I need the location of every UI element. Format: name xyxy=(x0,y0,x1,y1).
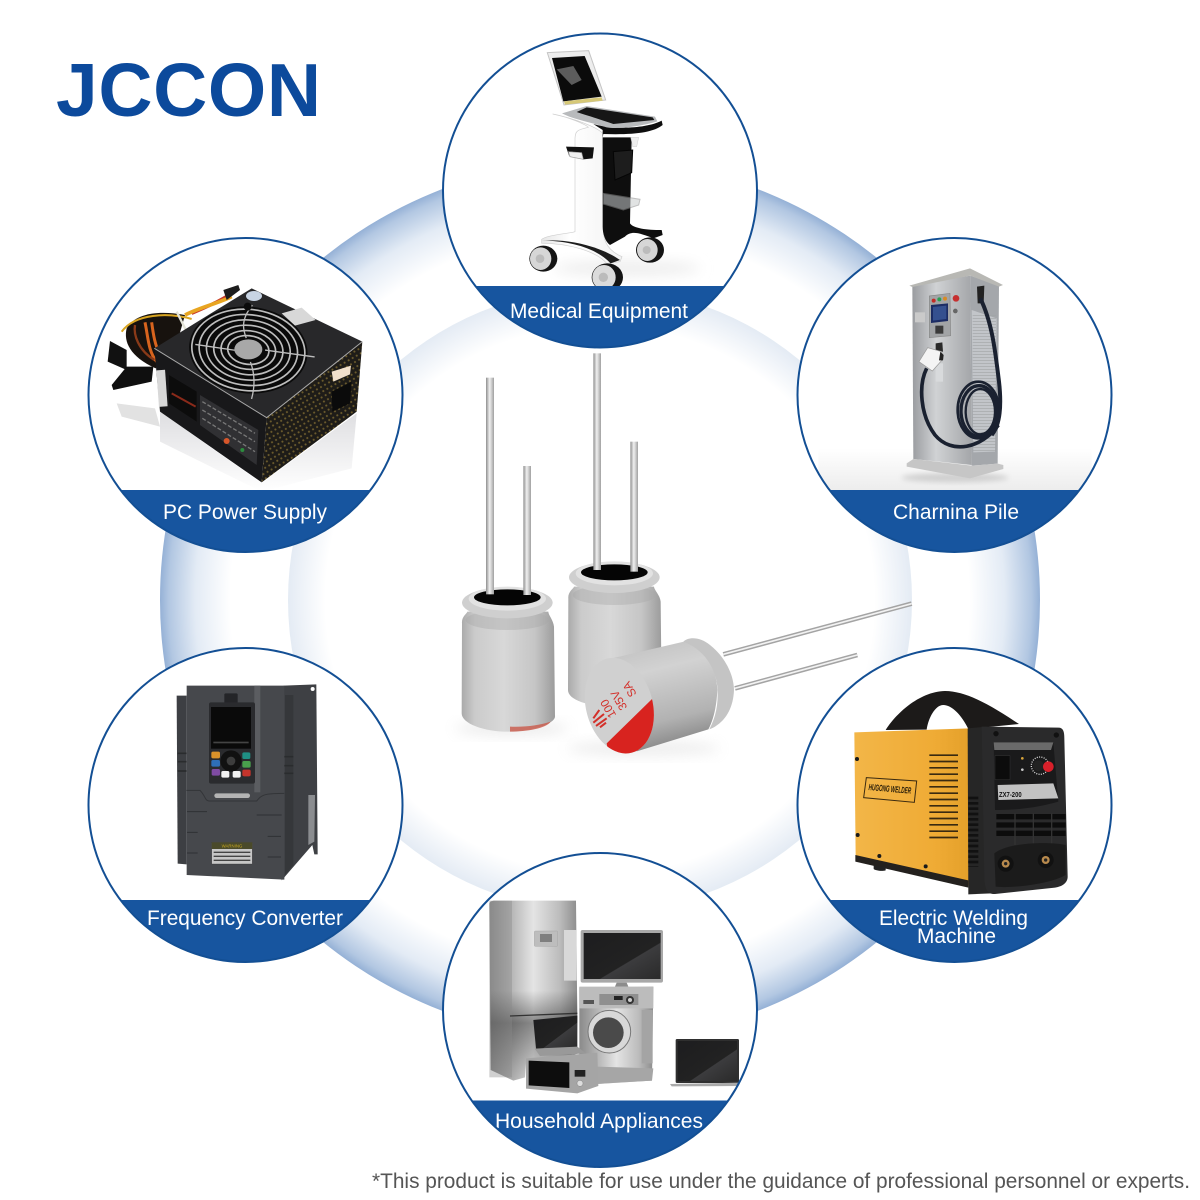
label: Machine xyxy=(917,925,996,948)
icon: frequency converter: WARNING xyxy=(222,844,243,849)
capacitors illustration xyxy=(455,353,912,763)
label: Charnina Pile xyxy=(893,501,1019,524)
footnote: *This product is suitable for use under the guidance of professional personnel or experts. xyxy=(372,1170,1190,1193)
panel: medical equipment xyxy=(443,34,757,348)
circle background xyxy=(443,853,757,1167)
icon: frequency converter xyxy=(177,684,318,880)
central disc xyxy=(288,288,912,912)
panel: PC power supply xyxy=(88,238,402,552)
icon: charging station xyxy=(818,268,1092,492)
icon: power supply unit xyxy=(108,285,362,492)
capacitor markings xyxy=(598,679,639,720)
panel: charging pile xyxy=(798,238,1112,552)
capacitor: front left xyxy=(462,378,555,732)
icon: appliances group xyxy=(489,901,739,1093)
circle outline xyxy=(798,648,1112,962)
circle background xyxy=(798,238,1112,552)
capacitor: lying with red marking xyxy=(575,604,912,763)
circle outline xyxy=(443,34,757,348)
circle outline xyxy=(798,238,1112,552)
circle outline xyxy=(443,853,757,1167)
label: Frequency Converter xyxy=(147,907,343,930)
circle outline xyxy=(88,648,402,962)
banner xyxy=(830,490,1080,552)
icon: welder: HUGONG WELDER xyxy=(868,782,912,796)
capacitor markings: SA xyxy=(620,679,639,699)
background ring xyxy=(160,160,1040,1040)
circle background xyxy=(88,648,402,962)
banner xyxy=(120,900,370,962)
capacitor markings: 100 xyxy=(598,696,619,720)
panel: household appliances xyxy=(443,853,757,1167)
icon: welder xyxy=(854,691,1068,894)
banner xyxy=(120,490,370,552)
label: PC Power Supply xyxy=(163,501,327,524)
banner xyxy=(475,286,725,347)
panel: frequency converter xyxy=(88,648,402,962)
capacitor markings: 35V xyxy=(608,688,630,712)
circle background xyxy=(798,648,1112,962)
floor shadows xyxy=(455,722,720,756)
icon: welder: ZX7-200 xyxy=(999,790,1022,799)
capacitor: back xyxy=(568,353,662,707)
banner xyxy=(472,1100,728,1167)
logo: JCCON: JCCON xyxy=(56,48,321,132)
circle background xyxy=(88,238,402,552)
label: Medical Equipment xyxy=(510,300,688,323)
icon: ultrasound cart xyxy=(529,51,700,291)
circle outline xyxy=(88,238,402,552)
circle background xyxy=(443,34,757,348)
label: Electric Welding xyxy=(879,907,1028,930)
banner xyxy=(830,900,1080,962)
label: Household Appliances xyxy=(495,1110,703,1133)
label xyxy=(879,907,1028,948)
panel: electric welding machine xyxy=(798,648,1112,962)
